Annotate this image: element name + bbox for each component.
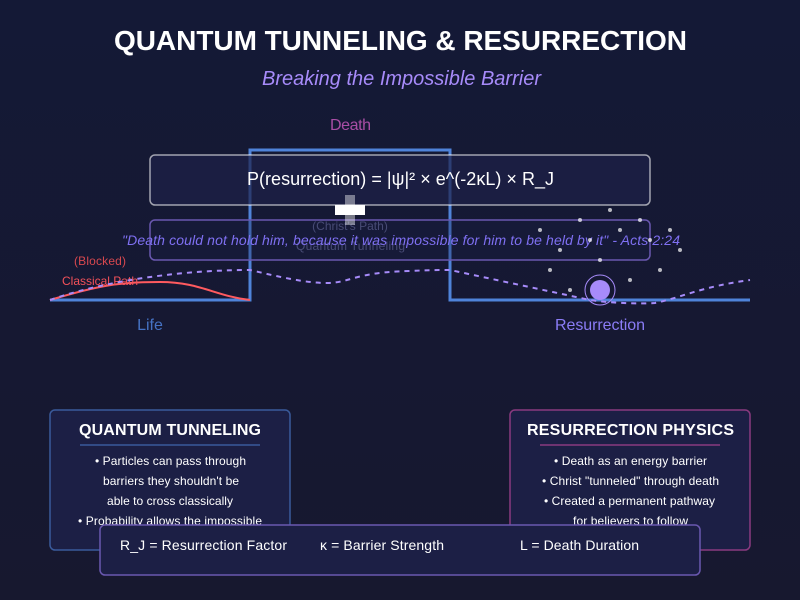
panel: resurrection physics — [510, 410, 750, 550]
classical path curve — [50, 282, 250, 300]
panel: resurrection physics: • Created a permanent pathway — [544, 494, 715, 508]
title: QUANTUM TUNNELING & RESURRECTION — [114, 25, 687, 56]
quote box: "Death could not hold him, because it was impossible for him to be held by it" - Acts 2:24 — [122, 232, 680, 248]
panel: quantum tunneling: barriers they shouldn't be — [103, 474, 239, 488]
panel: quantum tunneling: • Particles can pass through — [95, 454, 246, 468]
energy barrier line — [50, 150, 750, 300]
resurrection particle — [585, 275, 615, 305]
resurrection glow dots — [538, 208, 682, 292]
subtitle: Breaking the Impossible Barrier — [262, 68, 542, 90]
quote box — [122, 220, 680, 260]
panel: resurrection physics: • Death as an energy barrier — [554, 454, 707, 468]
label: Life: Life — [137, 317, 163, 334]
formula box: P(resurrection) = |ψ|² × e^(-2κL) × R_J — [247, 169, 554, 190]
legend box: L = Death Duration — [520, 537, 639, 553]
label: Christ's Path: (Christ's Path) — [312, 219, 388, 233]
legend box — [100, 525, 700, 575]
panel: resurrection physics: RESURRECTION PHYSICS — [527, 422, 734, 439]
label: Death: Death — [330, 117, 371, 134]
formula box — [150, 155, 650, 205]
legend box: κ = Barrier Strength — [320, 537, 444, 553]
panel: resurrection physics: for believers to follow — [573, 514, 688, 528]
panel: quantum tunneling: • Probability allows the impossible — [78, 514, 262, 528]
quantum tunneling dashed path — [50, 270, 750, 303]
cross icon — [335, 195, 365, 225]
panel: resurrection physics: • Christ "tunneled" through death — [542, 474, 719, 488]
label: Quantum Tunneling: Quantum Tunneling — [296, 239, 405, 253]
panel: quantum tunneling: able to cross classically — [107, 494, 233, 508]
legend box: R_J = Resurrection Factor — [120, 537, 287, 553]
label: Resurrection: Resurrection — [555, 317, 645, 334]
label: Blocked: (Blocked) — [74, 254, 126, 268]
panel: quantum tunneling — [50, 410, 290, 550]
label: Classical Path: Classical Path — [62, 274, 138, 288]
panel: quantum tunneling: QUANTUM TUNNELING — [79, 422, 261, 439]
